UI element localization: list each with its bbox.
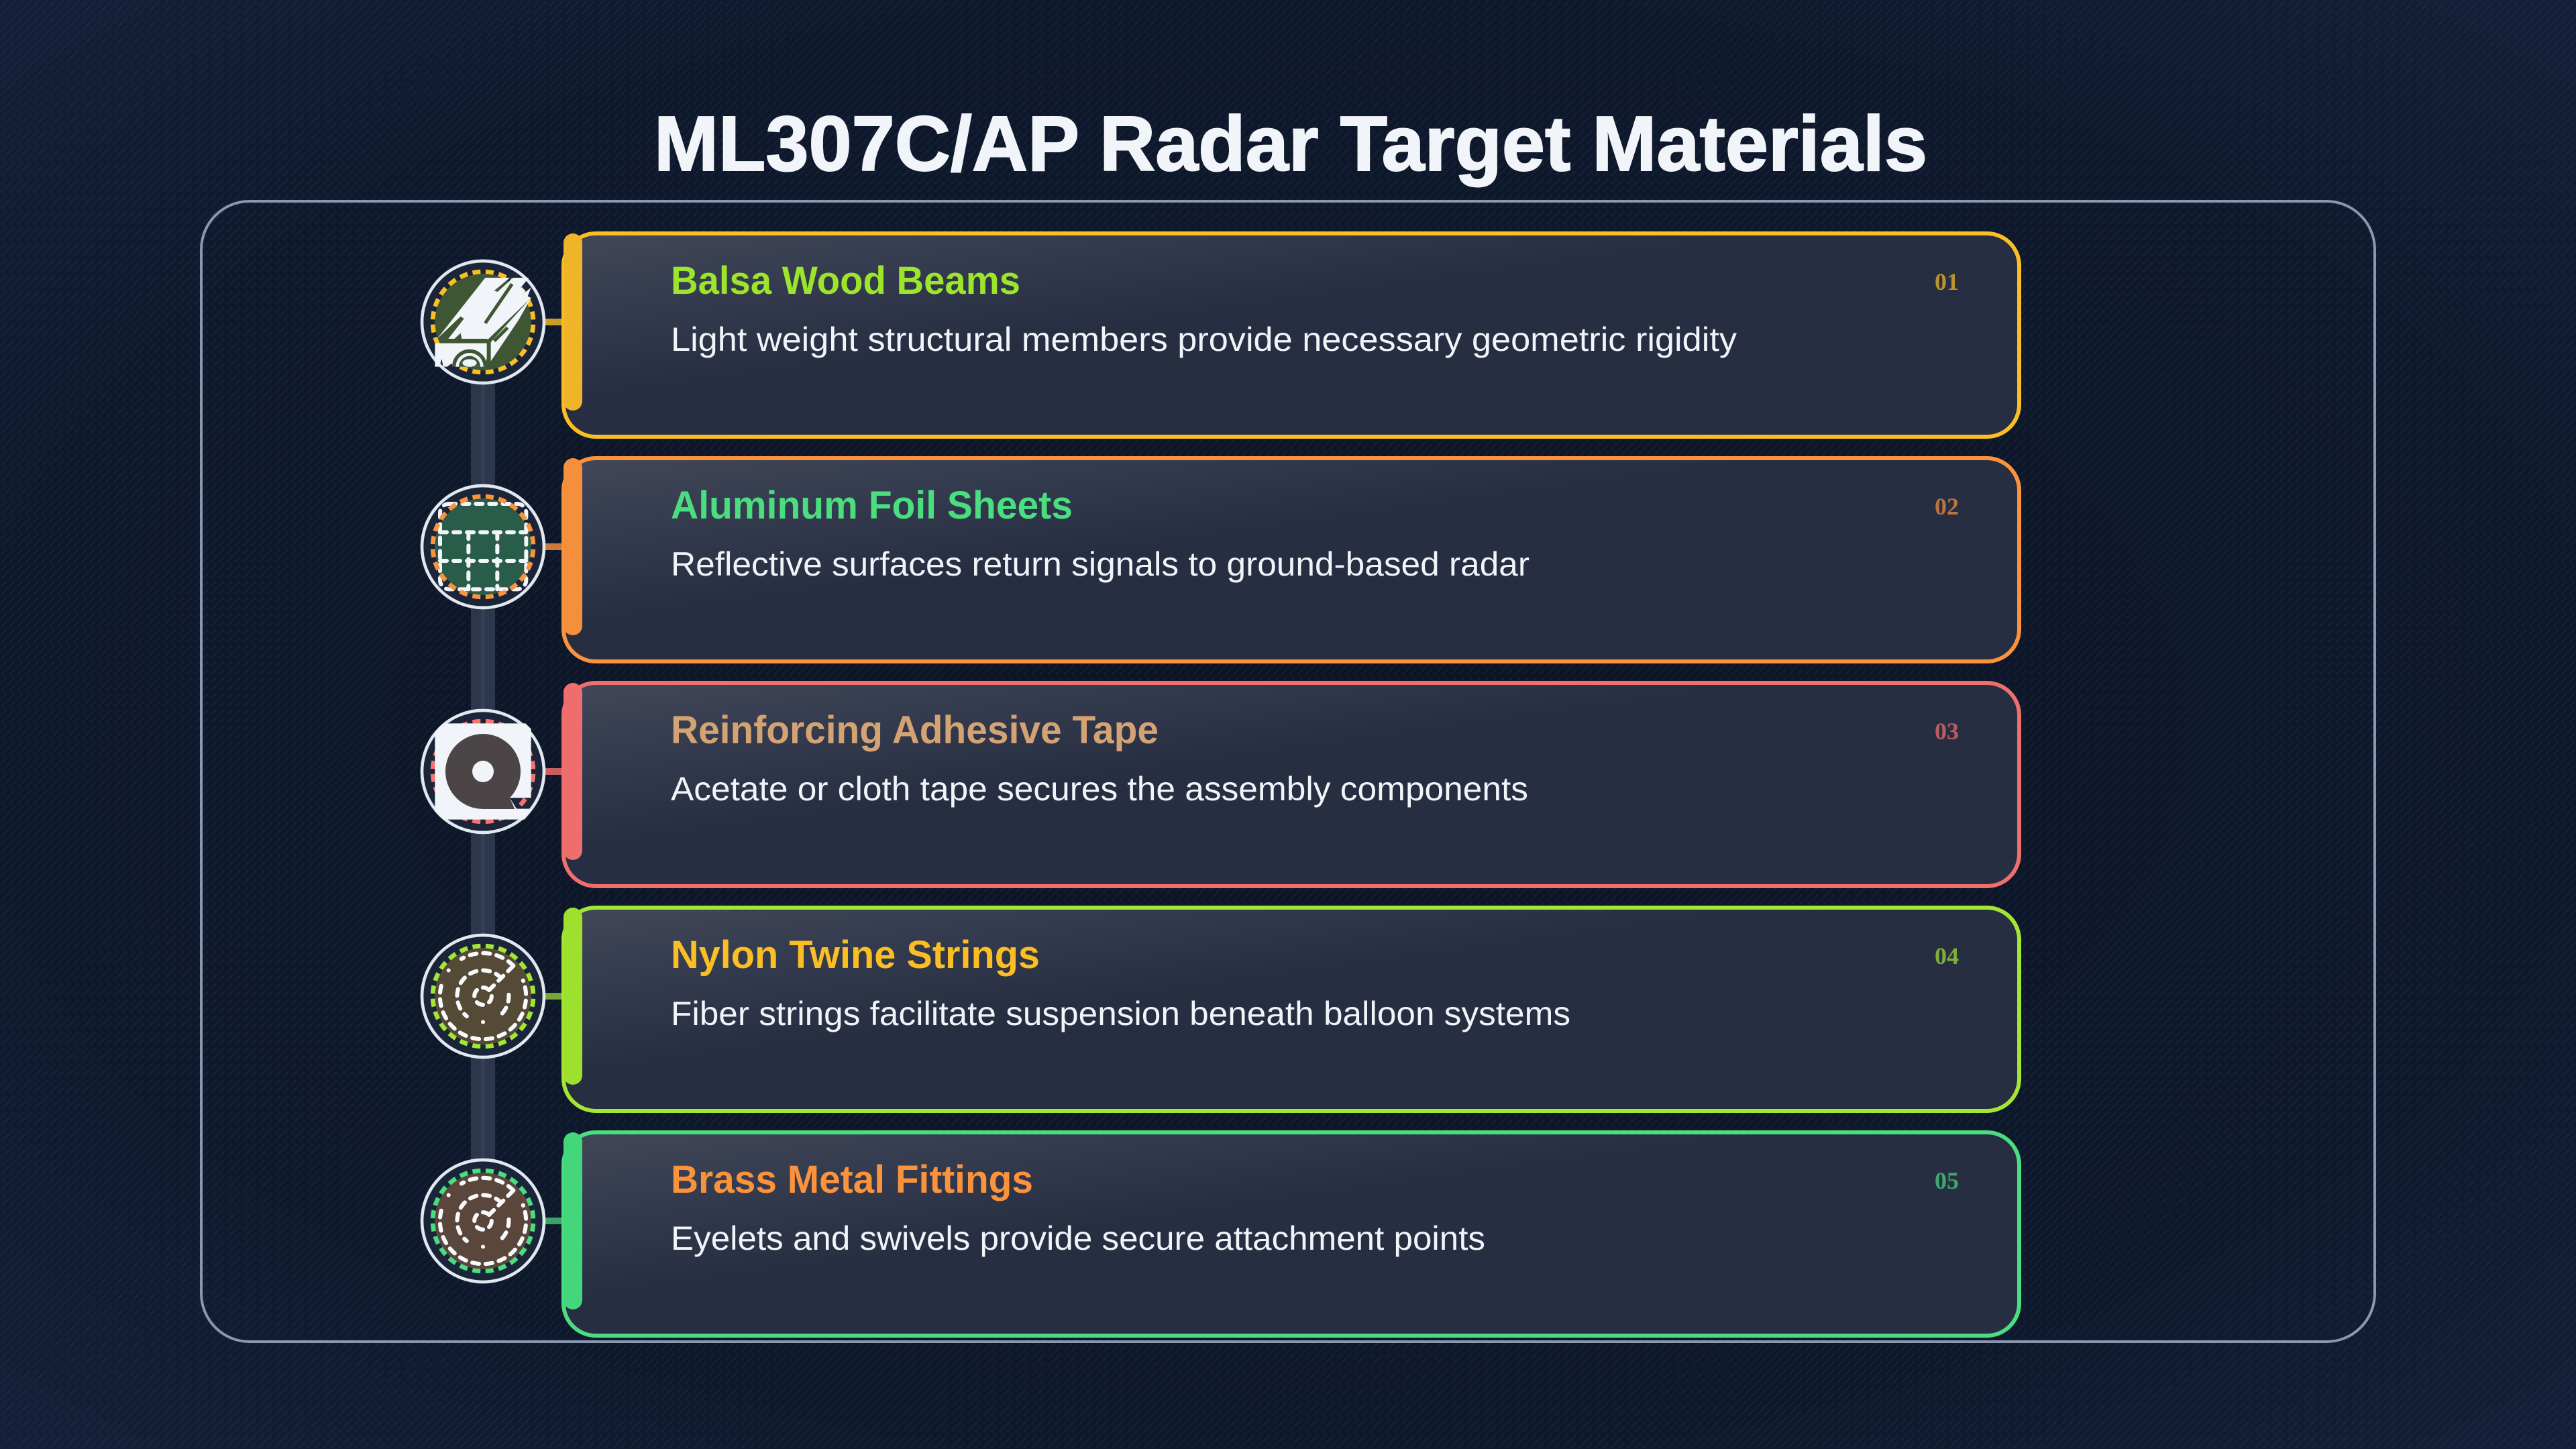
heading 2: Aluminum Foil Sheets <box>671 484 1073 527</box>
description 2: Reflective surfaces return signals to ground-based radar <box>671 545 1529 583</box>
description 1: Light weight structural members provide necessary geometric rigidity <box>671 321 1737 358</box>
description 5: Eyelets and swivels provide secure attachment points <box>671 1220 1485 1257</box>
heading 1: Balsa Wood Beams <box>671 259 1020 303</box>
number 1: 01 <box>1935 268 1959 295</box>
icon: wood beam <box>422 261 544 383</box>
connector 4 <box>543 993 564 1000</box>
icon: radar fitting <box>422 1160 544 1282</box>
title: ML307C/AP Radar Target Materials <box>654 100 1927 187</box>
connector 5 <box>543 1218 564 1224</box>
card 5 background <box>564 1132 2019 1336</box>
description 4: Fiber strings facilitate suspension beneath balloon systems <box>671 995 1570 1032</box>
card 1 background <box>564 233 2019 437</box>
number 4: 04 <box>1935 943 1959 969</box>
panel: item 4 nylon twine strings <box>422 908 2019 1111</box>
icon: foil grid <box>422 486 544 608</box>
panel: item 1 balsa wood beams <box>422 233 2019 437</box>
connector 3 <box>543 768 564 775</box>
card 4 background <box>564 908 2019 1111</box>
card 2 background <box>564 458 2019 661</box>
heading 4: Nylon Twine Strings <box>671 933 1040 977</box>
connector 1 <box>543 319 564 325</box>
card 3 background <box>564 683 2019 886</box>
heading 3: Reinforcing Adhesive Tape <box>671 708 1159 752</box>
accent bar 3 <box>564 683 582 860</box>
timeline spine <box>471 322 495 1220</box>
outer panel <box>201 201 2375 1342</box>
panel: item 3 reinforcing adhesive tape <box>422 683 2019 886</box>
description 3: Acetate or cloth tape secures the assembly components <box>671 770 1528 808</box>
heading 5: Brass Metal Fittings <box>671 1158 1033 1201</box>
accent bar 2 <box>564 458 582 635</box>
icon: tape roll <box>422 710 544 833</box>
connector 2 <box>543 543 564 550</box>
icon: radar twine <box>422 935 544 1057</box>
accent bar 4 <box>564 908 582 1085</box>
number 3: 03 <box>1935 718 1959 745</box>
number 2: 02 <box>1935 493 1959 520</box>
accent bar 1 <box>564 233 582 411</box>
number 5: 05 <box>1935 1167 1959 1194</box>
panel: item 2 aluminum foil sheets <box>422 458 2019 661</box>
panel: item 5 brass metal fittings <box>422 1132 2019 1336</box>
accent bar 5 <box>564 1132 582 1309</box>
